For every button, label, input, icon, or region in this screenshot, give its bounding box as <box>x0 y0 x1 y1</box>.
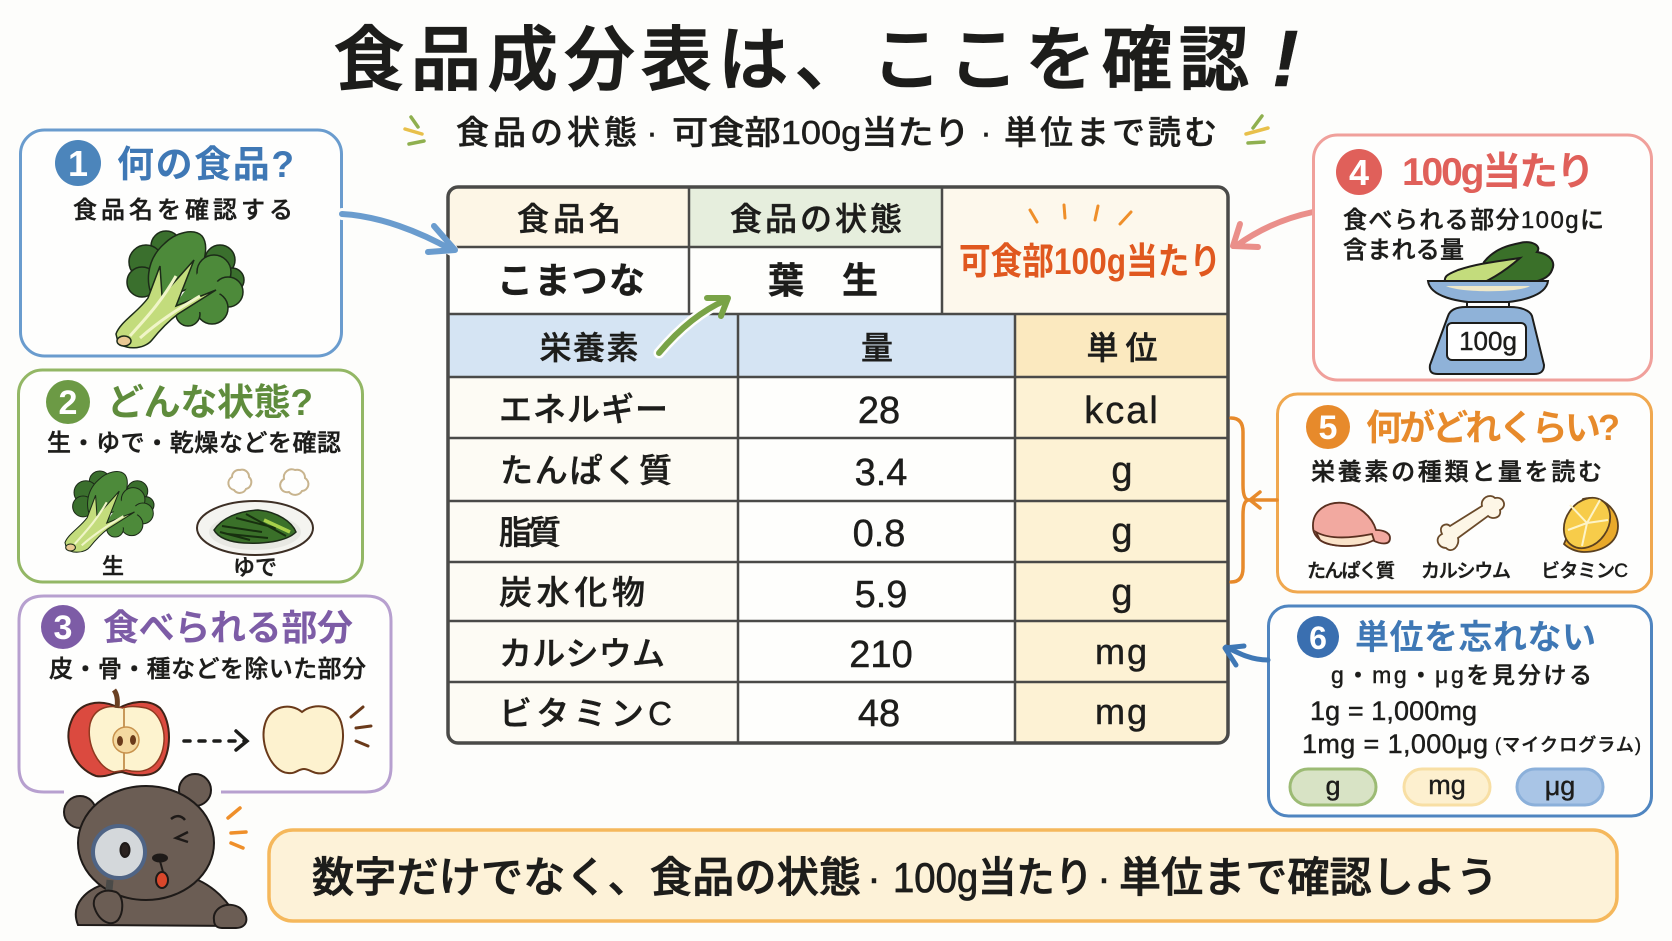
row: carbohydrate: g <box>1111 572 1133 614</box>
labels: nutrient icons: ビタミンC <box>1541 560 1628 582</box>
table cell colours <box>448 187 1228 743</box>
pill: g: g <box>1325 771 1341 801</box>
panel: 1 what food <box>20 130 342 356</box>
formula: mg to microgram <box>1302 729 1641 759</box>
heading 2: どんな状態? <box>107 382 313 423</box>
heading 1: 何の食品? <box>117 144 294 185</box>
row: vitamin C: 48 <box>858 693 900 735</box>
header: food state: 食品の状態 <box>730 201 902 237</box>
formula: mg to microgram: (マイクログラム) <box>1495 735 1641 755</box>
scale reading: 100g <box>1459 326 1517 356</box>
per 100g edible <box>959 205 1221 282</box>
pill: mg <box>1404 769 1490 805</box>
icon: apple <box>68 690 169 776</box>
row: carbohydrate: 5.9 <box>855 574 907 616</box>
labels: nutrient icons: カルシウム <box>1421 560 1511 582</box>
header: unit: 単位 <box>1086 330 1158 366</box>
icon: peeled apple <box>264 706 371 773</box>
subtitle: 単位まで読む <box>1004 114 1217 151</box>
formula: mg to microgram: 1mg = 1,000μg <box>1302 729 1488 759</box>
table frame fill <box>448 187 1228 743</box>
callout: footer: 単位まで確認しよう <box>1119 854 1498 901</box>
cell: komatsuna: こまつな <box>497 260 645 301</box>
number badge 2 <box>46 380 90 424</box>
row: calcium: 210 <box>849 634 913 676</box>
panel: 6 units <box>1268 606 1652 816</box>
number badge 1 <box>55 140 101 186</box>
text 4: 食べられる部分100gに <box>1343 207 1604 234</box>
header: amount: 量 <box>861 330 893 366</box>
panel: 5 how much <box>1278 394 1652 592</box>
row: calcium: カルシウム <box>499 635 665 672</box>
number badge 5: 5 <box>1319 409 1337 447</box>
pill: mg: mg <box>1428 770 1466 800</box>
row: fat: 脂質 <box>499 514 561 551</box>
labels: nutrient icons: たんぱく質 <box>1307 560 1395 582</box>
text 6: g・mg・μgを見分ける <box>1331 662 1592 688</box>
number badge 2: 2 <box>59 384 77 422</box>
number badge 4: 4 <box>1349 152 1369 193</box>
heading 3: 食べられる部分 <box>103 607 353 648</box>
callout: footer: 100g当たり <box>893 854 1093 901</box>
label raw: 生 <box>102 554 124 579</box>
row: energy <box>499 390 1160 432</box>
icon: left sparks <box>405 117 424 144</box>
row: carbohydrate: 炭水化物 <box>499 574 645 611</box>
row: carbohydrate <box>499 572 1133 616</box>
title: ! <box>1272 14 1299 103</box>
cell: leaf raw: 葉 生 <box>768 260 878 301</box>
callout: footer <box>269 830 1617 921</box>
text 4: 含まれる量 <box>1343 237 1464 264</box>
icon: right sparks <box>1246 116 1268 143</box>
row: protein: 3.4 <box>855 452 907 494</box>
subtitle: · <box>980 114 992 151</box>
header: nutrient: 栄養素 <box>540 330 638 366</box>
panel: nutrition table <box>448 187 1228 743</box>
row: calcium <box>499 631 1149 676</box>
number badge 4 <box>1336 149 1382 195</box>
panel: 3 edible part <box>19 596 391 792</box>
table grid <box>448 187 1228 743</box>
icon: spinach <box>116 231 244 348</box>
header: food name: 食品名 <box>517 201 621 237</box>
row: fat <box>499 511 1133 555</box>
subtitle: 食品の状態 <box>456 114 637 151</box>
heading 4: 100g当たり <box>1402 151 1595 194</box>
callout: footer: 数字だけでなく、食品の状態 <box>312 854 861 901</box>
number badge 5 <box>1306 405 1350 449</box>
icon: meat <box>1313 503 1390 546</box>
text 3: 皮・骨・種などを除いた部分 <box>49 656 366 683</box>
row: protein: たんぱく質 <box>500 452 672 489</box>
text 4 <box>1343 207 1604 264</box>
text 5: 栄養素の種類と量を読む <box>1311 459 1602 486</box>
panel: 2 what state <box>18 370 362 582</box>
icon: raw spinach <box>65 471 154 552</box>
icon: scale with spinach <box>1428 242 1553 374</box>
subtitle: · <box>646 114 658 151</box>
row: energy: エネルギー <box>499 391 668 428</box>
arrow: dashed <box>184 731 247 750</box>
label boiled: ゆで <box>233 555 277 580</box>
formula: g to mg: 1g = 1,000mg <box>1310 696 1477 726</box>
heading 5: 何がどれくらい? <box>1366 407 1620 448</box>
text 1: 食品名を確認する <box>73 197 293 224</box>
per 100g edible: 可食部100g当たり <box>959 241 1221 282</box>
pill: microgram: μg <box>1545 771 1575 801</box>
arrow: green state pointer <box>659 298 728 353</box>
pill: g <box>1290 769 1376 805</box>
callout: footer: · <box>867 854 881 901</box>
row: protein <box>500 450 1133 494</box>
number badge 1: 1 <box>68 143 88 184</box>
arrow: box 1 to table <box>342 214 455 252</box>
title: 食品成分表は、ここを確認 <box>334 21 1249 99</box>
arrow: bracket box 5 to table <box>1231 418 1277 582</box>
arrow: box 4 to table <box>1233 212 1313 247</box>
pill: microgram <box>1517 769 1603 805</box>
number badge 6 <box>1297 616 1339 658</box>
row: calcium: mg <box>1095 631 1149 672</box>
icon: lemon <box>1554 489 1620 557</box>
number badge 3 <box>41 605 85 649</box>
row: energy: 28 <box>858 390 900 432</box>
heading 6: 単位を忘れない <box>1355 619 1596 657</box>
number badge 6: 6 <box>1309 620 1327 656</box>
icon: boiled spinach plate <box>197 469 313 555</box>
row: vitamin C: ビタミンC <box>499 695 672 732</box>
subtitle <box>456 114 1217 151</box>
labels: nutrient icons <box>1307 560 1628 582</box>
arrow: box 6 to table <box>1225 646 1268 665</box>
number badge 3: 3 <box>54 609 72 647</box>
row: fat: 0.8 <box>853 513 905 555</box>
row: vitamin C: mg <box>1095 691 1149 732</box>
icon: bear with magnifier <box>64 774 246 928</box>
text 2: 生・ゆで・乾燥などを確認 <box>47 430 341 457</box>
row: fat: g <box>1111 511 1133 553</box>
callout: footer: · <box>1097 854 1111 901</box>
panel: 4 per 100g <box>1314 135 1652 380</box>
icon: bone <box>1438 496 1504 550</box>
row: energy: kcal <box>1084 390 1160 432</box>
subtitle: 可食部100g当たり <box>672 114 970 151</box>
row: protein: g <box>1111 450 1133 492</box>
row: vitamin C <box>499 691 1149 735</box>
